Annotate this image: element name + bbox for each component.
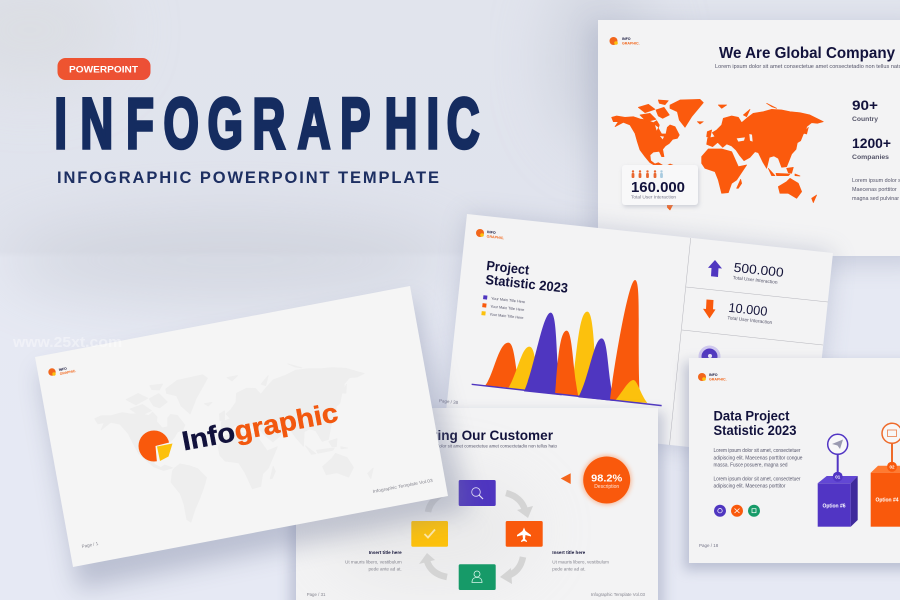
heading bbox=[714, 409, 797, 438]
icon row bbox=[714, 505, 760, 517]
icon: down arrow bbox=[703, 300, 716, 318]
3D bar: option 2: Option #4 bbox=[875, 498, 899, 504]
icon: people row bbox=[632, 170, 663, 178]
logo bbox=[698, 373, 727, 382]
stat: 10.000 bbox=[727, 300, 774, 326]
body text: Lorem ipsum dolor sit amet, consectetuer bbox=[714, 476, 801, 482]
wordmark: Infographic bbox=[180, 398, 340, 456]
logo mark bbox=[138, 430, 175, 463]
stat: 1200+ companies: 1200+ bbox=[852, 135, 891, 151]
logo: GRAPHIC. bbox=[622, 42, 640, 46]
caption: right bbox=[552, 550, 609, 572]
logo: GRAPHIC. bbox=[486, 234, 504, 240]
cycle arrows bbox=[419, 492, 533, 584]
pin marker: 01 bbox=[835, 474, 841, 480]
mountain chart bbox=[472, 280, 662, 406]
pin marker: 02 bbox=[889, 464, 895, 470]
body text: adipiscing elit. Maecenas porttitor bbox=[714, 484, 786, 490]
description text: Maecenas porttitor bbox=[852, 187, 897, 193]
stat: 90+ country bbox=[852, 97, 878, 123]
heading: Connecting Our Customer bbox=[383, 428, 554, 443]
heading: Data Project bbox=[714, 409, 790, 424]
legend: Your Main Title Here bbox=[489, 312, 524, 320]
stat: 10.000: 10.000 bbox=[728, 300, 768, 319]
world map bbox=[612, 99, 823, 210]
card: 160.000 users bbox=[622, 165, 699, 207]
watermark: www.25xt.com bbox=[12, 335, 122, 351]
slide: Connecting Our Customer bbox=[290, 408, 664, 600]
legend: Your Main Title Here bbox=[491, 297, 525, 304]
page number: Page / 18 bbox=[699, 543, 719, 548]
description text bbox=[852, 178, 900, 202]
icon: purple circle bbox=[698, 346, 720, 368]
logo: GRAPHIC. bbox=[709, 378, 727, 382]
stat: 1200+ companies bbox=[852, 135, 891, 161]
callout: 98.2% bbox=[582, 455, 632, 505]
template label: Infographic Template Vol.03 bbox=[372, 478, 434, 494]
body text: adipiscing elit. Maecenas porttitor congue bbox=[714, 455, 803, 461]
icon: up arrow bbox=[708, 260, 722, 277]
background world map bbox=[90, 345, 385, 536]
stat: 1200+ companies: Companies bbox=[852, 154, 889, 161]
stat: 90+ country: Country bbox=[852, 116, 878, 123]
step: check bbox=[411, 521, 448, 547]
small logo: INFO bbox=[58, 366, 68, 372]
3D bar: option 1: Option #6 bbox=[822, 504, 846, 510]
badge: PowerPoint bbox=[58, 58, 150, 80]
heading: We Are Global Company bbox=[719, 45, 895, 62]
step: search bbox=[459, 480, 496, 506]
callout: 98.2%: Description bbox=[594, 484, 619, 490]
callout: 98.2%: 98.2% bbox=[591, 473, 623, 485]
card: 160.000 users: 160.000 bbox=[631, 179, 685, 196]
logo: INFO bbox=[487, 230, 496, 235]
soft shading on slide bbox=[384, 516, 478, 550]
stat: 500.000 bbox=[732, 260, 784, 286]
heading and legend: Statistic 2023 bbox=[485, 272, 569, 296]
logo bbox=[476, 229, 504, 240]
heading and legend: Project bbox=[486, 258, 530, 278]
caption: left: Insert title here bbox=[369, 550, 402, 555]
footer bbox=[307, 592, 646, 597]
slide: Project Statistic 2023 bbox=[439, 214, 833, 460]
page label: Page / 1 bbox=[81, 541, 99, 549]
panel dividers bbox=[670, 238, 828, 445]
legend: Your Main Title Here bbox=[490, 305, 525, 312]
caption: left bbox=[345, 550, 402, 572]
stat: 500.000: Total User Interaction bbox=[732, 275, 778, 286]
tagline: Lorem ipsum dolor sit amet consectetue amet consectetadio non tellus hato bbox=[410, 444, 558, 448]
heading: Statistic 2023 bbox=[714, 423, 797, 438]
caption: left: pede ante ad at. bbox=[368, 567, 402, 572]
step: user bbox=[459, 564, 496, 590]
icon: pointer triangle bbox=[561, 473, 571, 484]
slide: We Are Global Company bbox=[590, 20, 900, 264]
footer: Page / 31 bbox=[307, 592, 326, 597]
stat: 90+ country: 90+ bbox=[852, 97, 878, 113]
3D bar: option 1 bbox=[818, 434, 858, 527]
small logo: GRAPHIC. bbox=[59, 369, 77, 376]
logo: INFO bbox=[709, 373, 718, 377]
caption: right: Insert title here bbox=[552, 550, 586, 555]
heading and legend bbox=[439, 230, 784, 438]
caption: left: Ut mauris libero, vestibulum bbox=[345, 560, 402, 565]
logo bbox=[610, 37, 640, 46]
stat: 500.000: 500.000 bbox=[733, 260, 784, 280]
small logo bbox=[48, 366, 77, 376]
description text: magna sed pulvinar bbox=[852, 196, 899, 202]
legend bbox=[481, 295, 525, 320]
body text: Lorem ipsum dolor sit amet, consectetuer bbox=[714, 448, 801, 454]
tagline: Lorem ipsum dolor sit amet consectetue amet consectetadio non tellus natoque bbox=[715, 64, 900, 70]
page number: Page / 38 bbox=[439, 398, 459, 405]
caption: right: pede ante ad at. bbox=[552, 567, 586, 572]
footer: Infographic Template Vol.03 bbox=[591, 592, 646, 597]
body text: massa. Fusce posuere, magna sed bbox=[714, 462, 788, 468]
logo: INFO bbox=[622, 37, 631, 41]
card: 160.000 users: Total User Interaction bbox=[631, 194, 676, 200]
slide: Data Project Statistic 2023 bbox=[684, 358, 900, 570]
3D bar: option 2 bbox=[871, 423, 900, 527]
slide: cover bbox=[35, 286, 470, 590]
body text bbox=[714, 448, 803, 490]
step: plane bbox=[506, 521, 543, 547]
caption: right: Ut mauris libero, vestibulum bbox=[552, 560, 609, 565]
main title: INFOGRAPHIC bbox=[54, 84, 480, 164]
badge: PowerPoint: POWERPOINT bbox=[69, 64, 138, 76]
stat: 10.000: Total User Interaction bbox=[727, 315, 773, 326]
subtitle: INFOGRAPHIC POWERPOINT TEMPLATE bbox=[57, 169, 439, 187]
